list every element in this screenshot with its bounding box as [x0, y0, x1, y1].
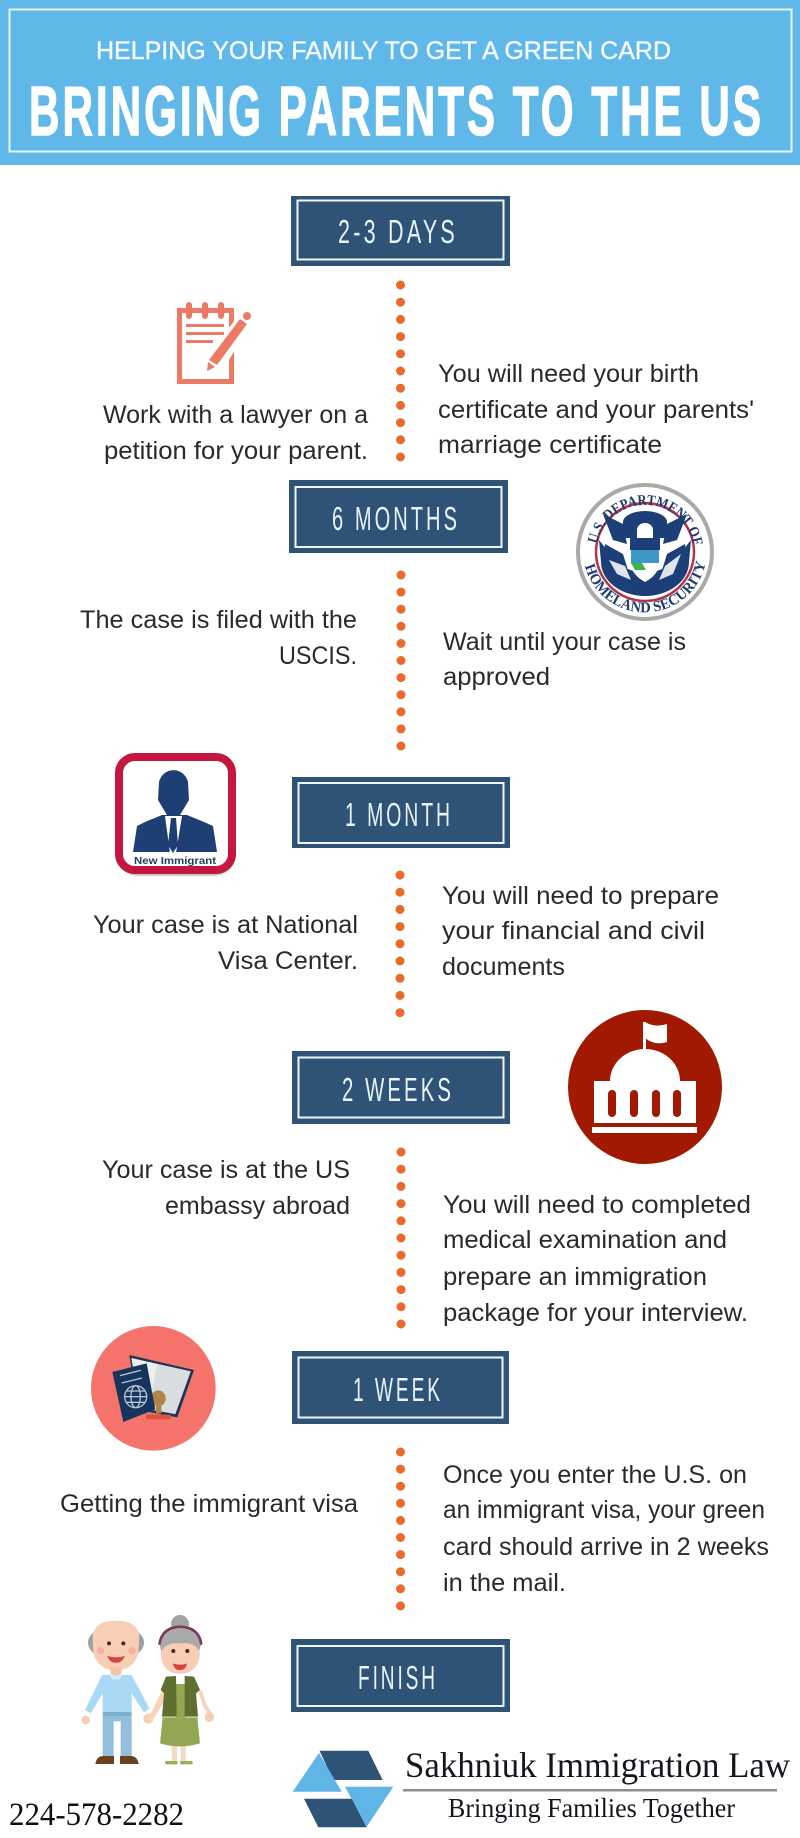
left text — [80, 606, 357, 670]
right text: medical examination and — [443, 1226, 727, 1254]
icon: homeland security seal: HOMELAND SECURITY — [584, 560, 706, 612]
time badge: 1 month: 1 MONTH — [345, 796, 453, 833]
left text — [103, 401, 368, 465]
woman — [147, 1615, 214, 1764]
left text — [93, 911, 358, 975]
time badge: 2-3 days: 2-3 DAYS — [338, 213, 458, 250]
left text: Work with a lawyer on a — [103, 401, 368, 429]
timeline dots — [396, 875, 404, 1014]
time badge: 1 month — [292, 777, 510, 848]
right text: in the mail. — [443, 1569, 566, 1597]
right text — [442, 882, 719, 981]
right text: You will need to completed — [443, 1191, 751, 1219]
time badge: 1 week — [292, 1351, 509, 1424]
right text: marriage certificate — [438, 431, 662, 459]
icon: homeland security seal: U.S. DEPARTMENT OF — [588, 495, 703, 544]
right text: package for your interview. — [443, 1299, 748, 1327]
timeline dots — [396, 1152, 406, 1324]
left text: Visa Center. — [218, 947, 358, 975]
icon: passport and stamp — [91, 1326, 216, 1451]
right text: card should arrive in 2 weeks — [443, 1533, 769, 1561]
time badge: 2 weeks: 2 WEEKS — [342, 1071, 454, 1108]
time badge: finish: FINISH — [358, 1659, 438, 1696]
left text: embassy abroad — [165, 1192, 350, 1220]
icon: new immigrant badge: New Immigrant — [134, 855, 217, 867]
step 3: 1 month — [93, 756, 719, 1014]
man — [81, 1621, 153, 1764]
step 4: 2 weeks — [102, 1010, 751, 1327]
time badge: 6 months: 6 MONTHS — [332, 500, 460, 537]
left text: Your case is at the US — [102, 1156, 350, 1184]
phone number: 224-578-2282 — [9, 1797, 184, 1833]
subtitle: HELPING YOUR FAMILY TO GET A GREEN CARD — [96, 37, 671, 65]
right text: your financial and civil — [442, 917, 705, 945]
right text: certificate and your parents' — [438, 396, 754, 424]
timeline dots — [396, 1452, 405, 1606]
right text — [443, 628, 686, 691]
step 2: 6 months — [80, 480, 714, 750]
tagline: Bringing Families Together — [448, 1793, 735, 1823]
right text: documents — [442, 953, 565, 981]
right text: an immigrant visa, your green — [443, 1496, 765, 1524]
icon: notepad and pencil — [180, 302, 251, 382]
left text: The case is filed with the — [80, 606, 357, 634]
timeline dots — [396, 575, 406, 746]
right text: Once you enter the U.S. on — [443, 1461, 747, 1489]
logo: Sakhniuk Immigration Law — [293, 1745, 790, 1827]
time badge: finish — [291, 1639, 510, 1712]
logo mark — [293, 1751, 393, 1827]
time badge: 2-3 days — [291, 196, 510, 266]
timeline dots — [396, 285, 405, 458]
left text: Your case is at National — [93, 911, 358, 939]
step 1: 2-3 days — [103, 196, 754, 465]
left text — [102, 1156, 350, 1220]
right text — [438, 360, 754, 459]
header banner — [0, 0, 800, 165]
right text: prepare an immigration — [443, 1263, 707, 1291]
left text: petition for your parent. — [104, 437, 368, 465]
time badge: 1 week: 1 WEEK — [353, 1371, 443, 1408]
right text — [443, 1191, 751, 1327]
time badge: 2 weeks — [292, 1051, 510, 1124]
firm name: Sakhniuk Immigration Law — [405, 1745, 790, 1785]
right text: You will need your birth — [438, 360, 699, 388]
icon: new immigrant badge — [116, 756, 236, 876]
icon: capitol building — [568, 1010, 722, 1164]
right text — [443, 1461, 769, 1597]
right text: approved — [443, 663, 550, 691]
right text: Wait until your case is — [443, 628, 686, 656]
step 5: 1 week — [60, 1326, 769, 1606]
icon: elderly couple — [81, 1615, 214, 1764]
left text: USCIS. — [279, 642, 357, 670]
time badge: 6 months — [289, 480, 508, 553]
right text: You will need to prepare — [442, 882, 719, 910]
icon: homeland security seal — [576, 483, 714, 621]
left text: Getting the immigrant visa — [60, 1490, 358, 1518]
